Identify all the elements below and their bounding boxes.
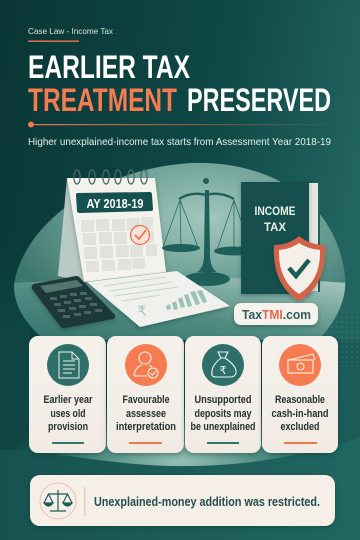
card text: deposits may bbox=[194, 408, 252, 420]
header bbox=[28, 26, 331, 148]
card text: Favourable bbox=[122, 394, 170, 406]
icon: calculator bbox=[32, 276, 115, 328]
card text: Reasonable bbox=[275, 394, 325, 406]
card: unsupported deposits bbox=[185, 336, 261, 453]
icon: person with check bbox=[125, 344, 167, 386]
card text: excluded bbox=[280, 421, 320, 433]
card accent bar bbox=[207, 442, 239, 444]
card accent bar bbox=[129, 442, 162, 444]
card: earlier year bbox=[29, 336, 106, 453]
card text: provision bbox=[48, 421, 88, 433]
banner divider bbox=[84, 487, 86, 516]
card: reasonable cash bbox=[262, 336, 338, 453]
subtitle: Higher unexplained-income tax starts from Assessment Year 2018-19 bbox=[28, 137, 331, 148]
illustration bbox=[14, 162, 346, 340]
title bbox=[28, 49, 331, 118]
card text: cash-in-hand bbox=[272, 408, 328, 420]
card text: Earlier year bbox=[44, 394, 92, 406]
card text bbox=[190, 394, 256, 433]
card accent bar bbox=[52, 442, 84, 444]
card text: uses old bbox=[50, 408, 86, 420]
title: EARLIER TAX bbox=[28, 49, 191, 85]
logo pill bbox=[234, 303, 318, 325]
cards row bbox=[29, 336, 338, 453]
icon: money bag: ₹ bbox=[220, 365, 226, 377]
icon: report paper bbox=[87, 271, 230, 327]
icon: cash notes bbox=[279, 344, 321, 386]
icon: calendar: AY 2018-19 bbox=[86, 196, 144, 211]
backdrop blob bbox=[14, 163, 345, 348]
banner text: Unexplained-money addition was restricted. bbox=[94, 494, 320, 509]
eyebrow label: Case Law - Income Tax bbox=[28, 26, 114, 36]
icon: scales of justice bbox=[162, 178, 254, 286]
table surface bbox=[14, 278, 346, 340]
icon: shield with check bbox=[274, 236, 325, 301]
card text bbox=[116, 394, 176, 433]
icon: document bbox=[47, 344, 89, 386]
title rule with dot bbox=[28, 122, 331, 128]
card text: interpretation bbox=[116, 421, 176, 433]
card text: Unsupported bbox=[194, 394, 252, 406]
card text bbox=[44, 394, 92, 433]
card: favourable bbox=[107, 336, 184, 453]
card text: assessee bbox=[126, 408, 166, 420]
icon: income tax book: TAX bbox=[264, 220, 286, 234]
card text: be unexplained bbox=[190, 421, 256, 433]
card text bbox=[272, 394, 328, 433]
icon: calendar bbox=[58, 170, 166, 282]
title: TREATMENT bbox=[28, 82, 177, 118]
lower wave bbox=[0, 340, 360, 466]
logo pill: TaxTMI.com bbox=[242, 308, 311, 322]
right side band with dot texture bbox=[322, 312, 360, 445]
icon: income tax book: INCOME bbox=[254, 204, 296, 218]
icon: report paper: ₹ bbox=[136, 302, 148, 320]
icon: income tax book bbox=[241, 182, 320, 294]
eyebrow accent line bbox=[28, 40, 79, 42]
bottom banner bbox=[30, 475, 335, 526]
icon: scales badge bbox=[40, 483, 76, 519]
card accent bar bbox=[284, 442, 317, 444]
